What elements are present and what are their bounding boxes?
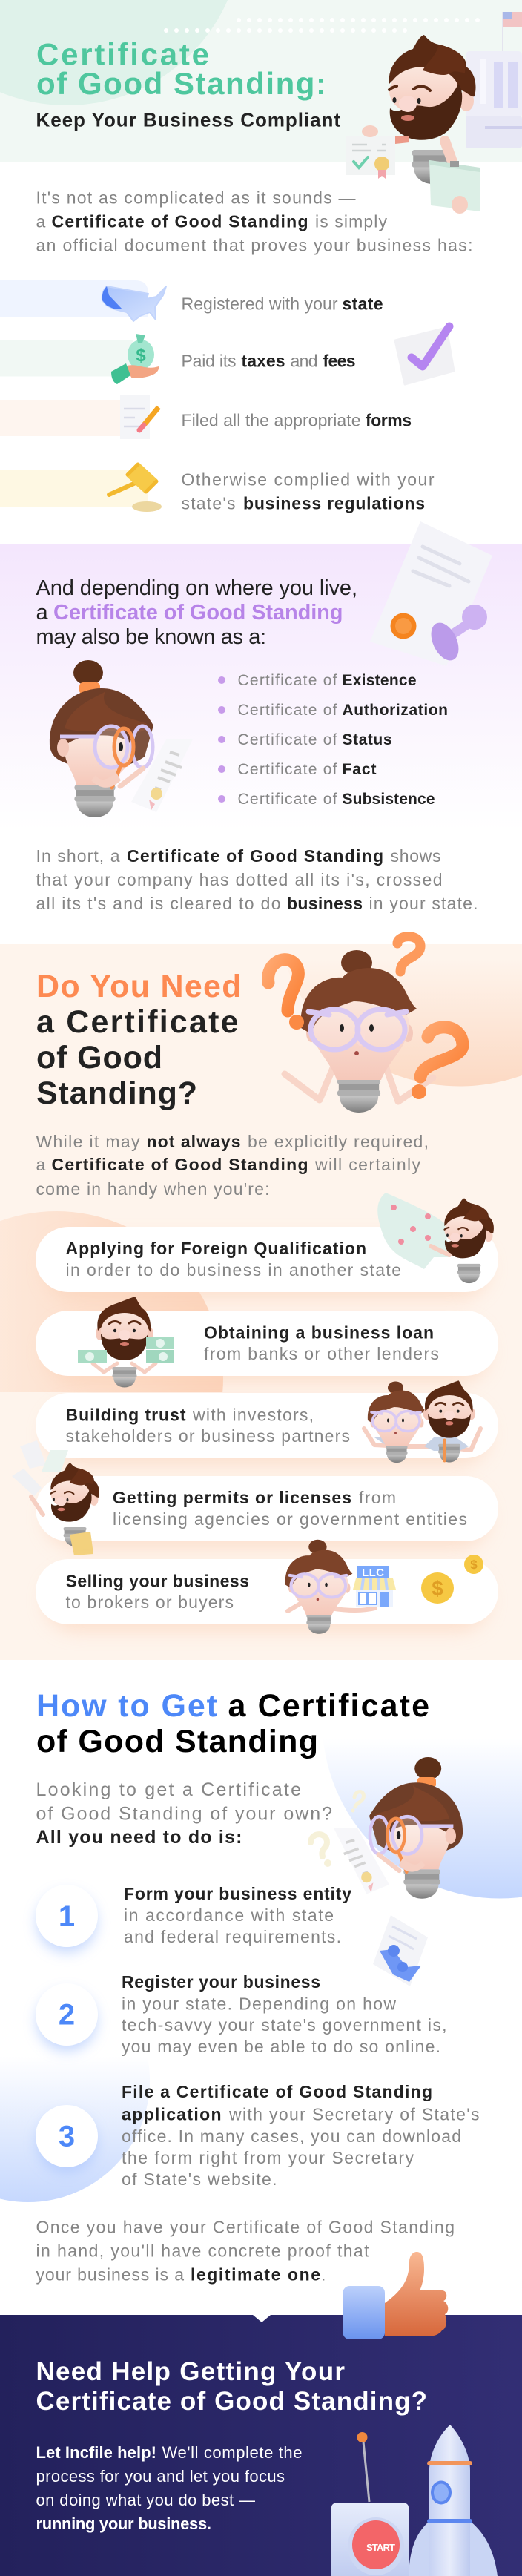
item: subsistence — [218, 791, 435, 808]
text: once you have: Once you have your Certificate of Good Standing — [36, 2218, 455, 2237]
item: authorization: Authorization — [343, 702, 448, 719]
icon: gavel — [109, 464, 162, 512]
label: and — [291, 352, 317, 371]
heading: a Certificate — [228, 1688, 429, 1724]
title: Certificate — [36, 37, 209, 71]
heading: Do You Need — [36, 969, 242, 1004]
item: fact — [218, 761, 377, 778]
title — [36, 37, 326, 101]
heading: a — [36, 601, 49, 625]
text: while it may: not always — [147, 1132, 240, 1151]
arm and folder — [429, 141, 480, 214]
icon: money bag in hand: $ — [136, 346, 146, 366]
text: intro paragraph — [36, 188, 473, 255]
label: fees — [323, 352, 356, 371]
card: permits or licenses: from — [359, 1488, 396, 1507]
text: in short: Certificate of Good Standing — [127, 846, 383, 866]
text: once you have: your business is a — [36, 2265, 184, 2285]
step 2: tech-savvy your state's government is, — [122, 2015, 446, 2035]
illustration: woman with shop and coins — [285, 1540, 483, 1634]
panel: how to get a certificate — [0, 1693, 522, 2285]
illustration: document with seal and stamp — [370, 521, 492, 666]
item: existence: Existence — [343, 672, 417, 689]
card: business loan — [36, 1297, 498, 1387]
icon: US map — [102, 286, 166, 321]
icon: money bag in hand — [111, 334, 159, 384]
label — [181, 470, 435, 513]
text: looking to get: Looking to get a Certificate — [36, 1779, 301, 1800]
label: state — [343, 294, 383, 313]
illustration: woman with magnifier and question marks — [311, 1757, 463, 1899]
label: Registered with your — [181, 294, 338, 313]
card: building trust — [36, 1380, 498, 1466]
label: taxes — [242, 352, 285, 371]
card: permits or licenses: Getting permits or licenses — [113, 1488, 351, 1507]
man head — [389, 35, 476, 184]
label: state's — [181, 494, 236, 513]
step 3 — [36, 2082, 479, 2189]
illustration: document with map pins — [373, 1915, 428, 1986]
large coin — [421, 1572, 454, 1604]
text: once you have: in hand, you'll have concrete proof that — [36, 2241, 369, 2261]
step 3: of State's website. — [122, 2170, 277, 2189]
text: while it may: be explicitly required, — [248, 1132, 429, 1151]
illustration: thumbs up — [343, 2252, 448, 2339]
text: let incfile help: process for you and let you focus — [36, 2467, 285, 2486]
step 2: in your state. Depending on how — [122, 1994, 396, 2013]
step 2: you may even be able to do so online. — [122, 2037, 440, 2056]
card: permits or licenses: licensing agencies or government entities — [113, 1509, 467, 1529]
text: in short: shows — [390, 846, 440, 866]
title: of Good Standing: — [36, 66, 326, 101]
item: subsistence: Certificate of — [237, 791, 337, 808]
illustration: woman with magnifier — [50, 660, 193, 817]
illustration: man with certificate and courthouse — [346, 12, 522, 214]
illustration: start remote: START — [366, 2542, 395, 2553]
heading: a Certificate — [36, 1004, 239, 1040]
card: foreign qualification — [36, 1193, 498, 1299]
large coin: $ — [432, 1577, 443, 1600]
text: intro paragraph: a — [36, 212, 46, 231]
illustration: man with permits — [12, 1440, 99, 1555]
label: Otherwise complied with your — [181, 470, 435, 490]
shop — [353, 1566, 396, 1607]
step 3: office. In many cases, you can download — [122, 2127, 461, 2146]
shop: LLC — [362, 1567, 384, 1579]
courthouse — [466, 12, 522, 148]
card: permits or licenses — [12, 1440, 498, 1555]
step 3: with your Secretary of State's — [228, 2105, 479, 2124]
card: building trust: stakeholders or business partners — [65, 1426, 350, 1446]
text: looking to get — [36, 1779, 332, 1848]
text: looking to get: of Good Standing of your own? — [36, 1804, 332, 1825]
panel: do you need a certificate — [0, 937, 522, 1660]
text: while it may: While it may — [36, 1132, 140, 1151]
step 1 — [36, 1884, 351, 1952]
step 3: 3 — [59, 2120, 75, 2152]
label: business regulations — [243, 494, 425, 513]
text: once you have: legitimate one — [191, 2265, 320, 2285]
woman — [301, 950, 417, 1113]
label — [181, 352, 356, 371]
step 2: Register your business — [122, 1972, 320, 1992]
item: fact: Fact — [343, 761, 377, 778]
icon: check card — [395, 326, 454, 384]
card: business loan: from banks or other lenders — [204, 1344, 439, 1363]
card: business loan: Obtaining a business loan — [204, 1323, 434, 1343]
step 3: application — [122, 2105, 221, 2124]
icon: document and pencil — [120, 395, 159, 439]
item: existence — [218, 672, 417, 689]
text: intro paragraph: an official document that proves your business has: — [36, 236, 473, 255]
subtitle: Keep Your Business Compliant — [36, 108, 340, 131]
illustration: rocket — [409, 2425, 498, 2576]
top question mark — [397, 937, 420, 972]
illustration: puzzled woman with question marks — [268, 937, 463, 1113]
heading: How to Get — [36, 1688, 217, 1724]
text: while it may: a — [36, 1155, 46, 1174]
text: in short — [36, 846, 478, 913]
step 2: 2 — [59, 1998, 75, 2031]
heading: Certificate of Good Standing — [53, 601, 343, 625]
heading: may also be known as a: — [36, 625, 266, 649]
heading: Certificate of Good Standing? — [36, 2387, 427, 2416]
step 3: File a Certificate of Good Standing — [122, 2082, 432, 2101]
dot pattern — [164, 18, 480, 33]
heading — [36, 2357, 427, 2416]
item: subsistence: Subsistence — [343, 791, 435, 808]
label: forms — [366, 411, 412, 430]
heading: of Good Standing — [36, 1724, 318, 1759]
card: selling your business — [36, 1540, 498, 1634]
item: status — [218, 731, 392, 748]
heading — [36, 969, 242, 1111]
item: authorization: Certificate of — [237, 702, 337, 719]
panel: need help — [0, 2252, 522, 2576]
card: building trust: Building trust — [65, 1405, 186, 1424]
illustration: start remote — [331, 2432, 409, 2576]
text: in short: that your company has dotted all its i's, crossed — [36, 870, 442, 889]
text: looking to get: All you need to do is: — [36, 1827, 242, 1848]
right question mark — [412, 1027, 463, 1099]
text: in short: in your state. — [369, 894, 478, 913]
label: Filed all the appropriate — [181, 411, 360, 430]
text: while it may: come in handy when you're: — [36, 1179, 270, 1199]
card: selling your business: Selling your business — [65, 1571, 249, 1590]
heading: Standing? — [36, 1075, 197, 1111]
certificate — [346, 125, 409, 179]
text: once you have: . — [321, 2265, 326, 2285]
step 1: Form your business entity — [124, 1884, 351, 1903]
list item: taxes and fees — [0, 326, 454, 384]
item: status: Certificate of — [237, 731, 337, 748]
list item: registered with state — [0, 280, 383, 321]
card: selling your business: to brokers or buyers — [65, 1592, 234, 1612]
step 3: the form right from your Secretary — [122, 2148, 414, 2167]
step 1: and federal requirements. — [124, 1927, 341, 1946]
heading: of Good — [36, 1040, 162, 1075]
item: authorization — [218, 702, 448, 719]
section: intro header — [0, 0, 522, 214]
text: intro paragraph: Certificate of Good Standing — [52, 212, 308, 231]
text: intro paragraph: is simply — [315, 212, 387, 231]
label: Paid its — [181, 352, 236, 371]
illustration: man pinning a map — [377, 1193, 494, 1283]
arms — [285, 1068, 433, 1101]
panel: also known as — [0, 521, 522, 913]
list of alternative names — [218, 672, 448, 808]
small coin: $ — [470, 1558, 478, 1572]
text: let incfile help — [36, 2443, 303, 2533]
illustration: business partners — [364, 1380, 480, 1463]
small coin — [464, 1555, 483, 1574]
item: fact: Certificate of — [237, 761, 337, 778]
heading: Need Help Getting Your — [36, 2357, 345, 2386]
text: once you have — [36, 2218, 455, 2285]
text: let incfile help: on doing what you do best — — [36, 2491, 255, 2509]
item: status: Status — [343, 731, 392, 748]
item: existence: Certificate of — [237, 672, 337, 689]
list item: business regulations — [0, 464, 435, 513]
text: while it may: Certificate of Good Standing — [52, 1155, 308, 1174]
step 1: 1 — [59, 1900, 75, 1933]
list item: forms — [0, 395, 412, 439]
card: foreign qualification: in order to do business in another state — [65, 1260, 401, 1279]
text: let incfile help: Let Incfile help! — [36, 2443, 156, 2462]
text: in short: In short, a — [36, 846, 120, 866]
heading: And depending on where you live, — [36, 576, 357, 600]
heading — [36, 576, 357, 649]
step 2 — [36, 1972, 446, 2056]
heading — [36, 1688, 429, 1759]
card: foreign qualification: Applying for Foreign Qualification — [65, 1239, 366, 1258]
illustration: man holding money — [78, 1297, 174, 1387]
text: while it may: will certainly — [314, 1155, 421, 1174]
text: while it may — [36, 1132, 429, 1199]
large question mark — [311, 1834, 331, 1867]
text: intro paragraph: It's not as complicated as it sounds — — [36, 188, 356, 208]
text: let incfile help: We'll complete the — [162, 2443, 303, 2462]
text: in short: all its t's and is cleared to do — [36, 894, 281, 913]
left question mark — [268, 960, 304, 1030]
card: building trust: with investors, — [192, 1405, 314, 1424]
text: in short: business — [287, 894, 363, 913]
small question mark — [351, 1792, 363, 1813]
step 1: in accordance with state — [124, 1905, 334, 1925]
text: let incfile help: running your business. — [36, 2514, 211, 2533]
